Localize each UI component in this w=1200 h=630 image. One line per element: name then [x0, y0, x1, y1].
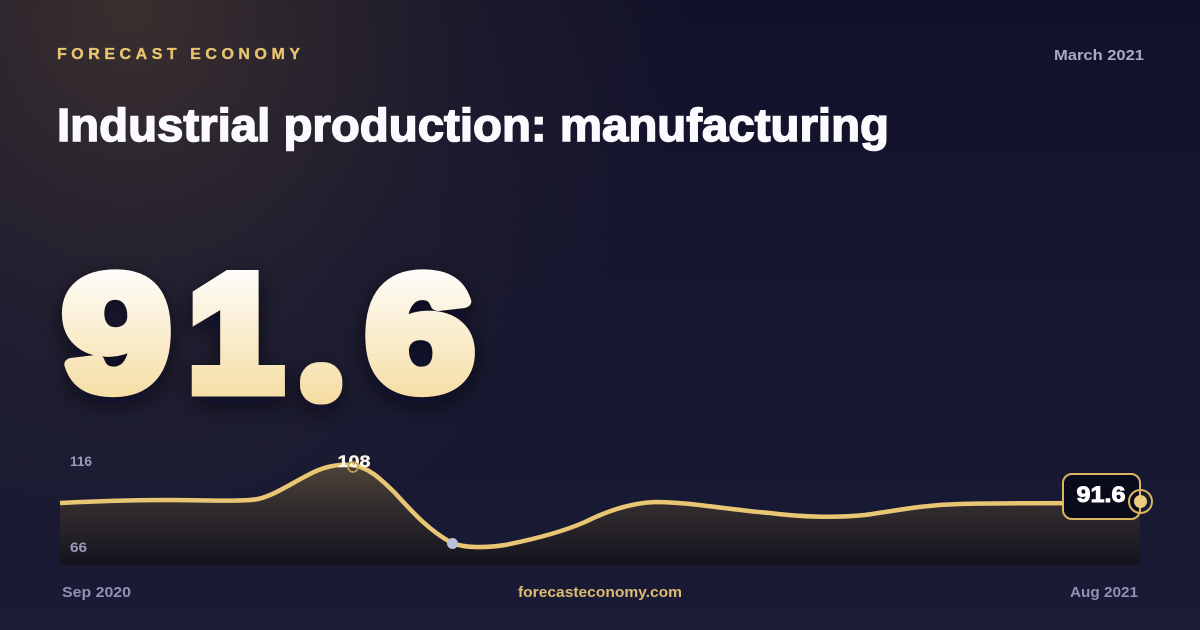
- low point marker: [447, 538, 458, 549]
- current point marker: [1129, 490, 1152, 513]
- end date label: Aug 2021: [1070, 584, 1138, 601]
- big value: 1: [189, 242, 282, 423]
- website label: forecasteconomy.com: [518, 584, 682, 601]
- big value: 9: [63, 243, 170, 424]
- chart area fill: [60, 465, 1140, 565]
- big value: [63, 242, 474, 424]
- sparkline chart: [60, 452, 1152, 565]
- peak value label: 108: [338, 452, 370, 471]
- start date label: Sep 2020: [62, 584, 131, 601]
- big value: .: [317, 360, 325, 392]
- peak marker: [348, 462, 358, 472]
- brand label: FORECAST ECONOMY: [57, 46, 300, 63]
- title: Industrial production: manufacturing: [57, 99, 889, 151]
- big value: 6: [366, 242, 474, 423]
- date label: March 2021: [1054, 47, 1144, 64]
- current value badge: [1063, 474, 1140, 519]
- chart line: [60, 465, 1140, 547]
- axis max label: 116: [70, 454, 92, 469]
- current value badge: 91.6: [1076, 482, 1126, 507]
- axis min label: 66: [70, 540, 88, 555]
